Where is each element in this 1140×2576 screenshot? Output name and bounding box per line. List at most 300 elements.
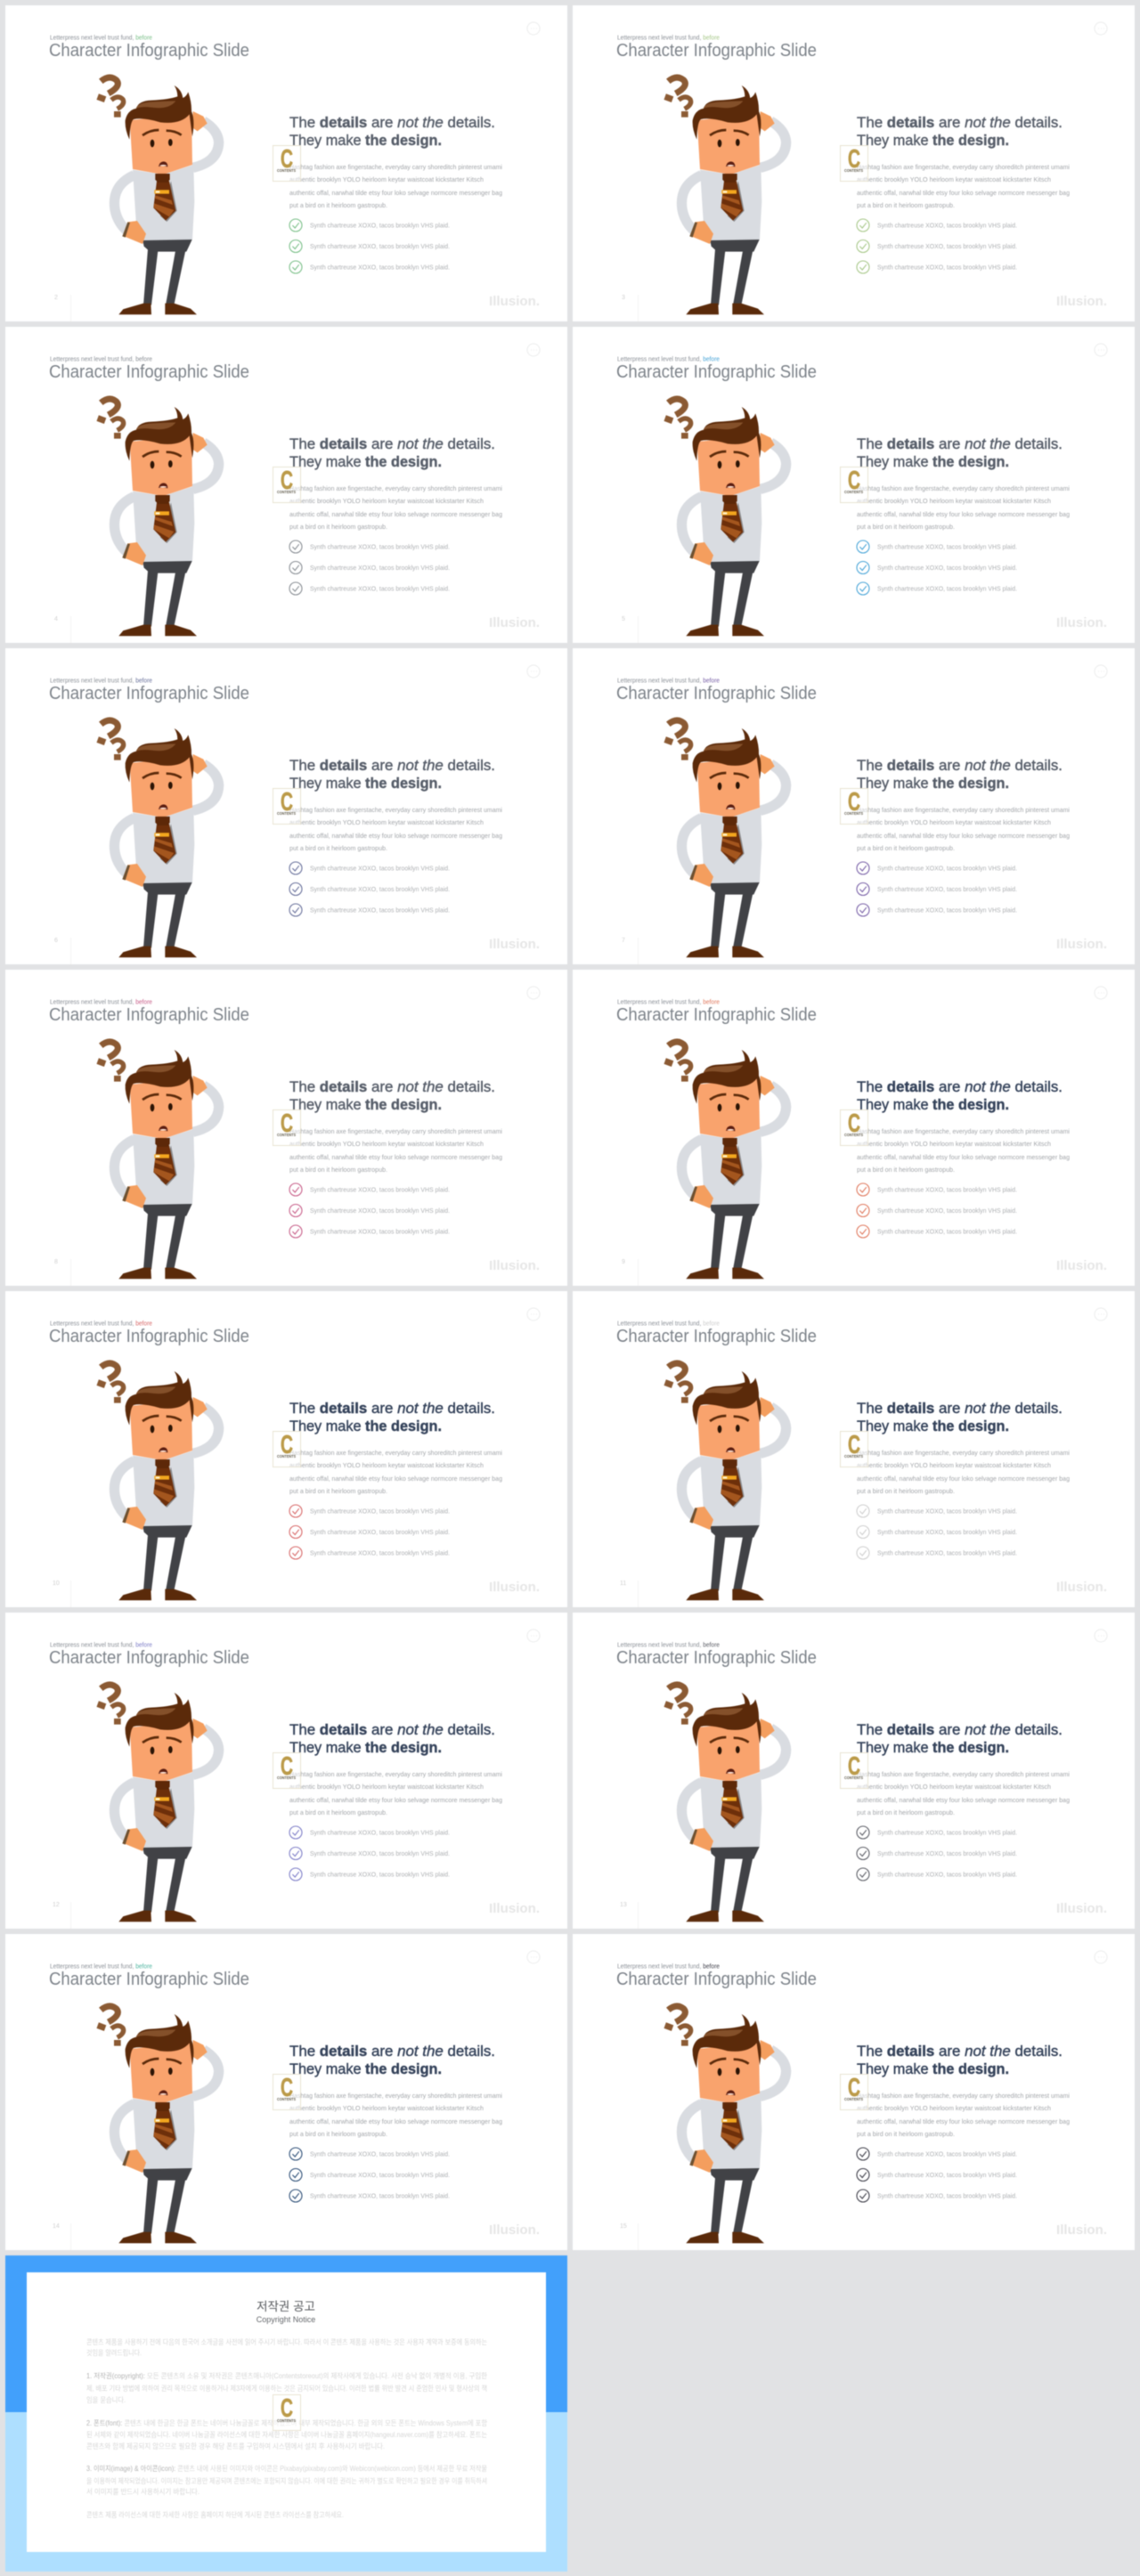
body paragraph: authentic brooklyn YOLO heirloom keytar waistcoat kickstarter Kitsch [289, 818, 484, 826]
body paragraph: put a bird on it heirloom gastropub. [857, 1487, 955, 1495]
top right icon [1095, 1308, 1107, 1321]
checklist [289, 1826, 450, 1881]
subtitle: Letterpress next level trust fund, before [617, 354, 720, 363]
body paragraph: put a bird on it heirloom gastropub. [857, 2130, 955, 2138]
checklist: Synth chartreuse XOXO, tacos brooklyn VHS plaid. [310, 584, 450, 593]
heading [857, 114, 1063, 149]
checklist: Synth chartreuse XOXO, tacos brooklyn VHS plaid. [877, 1870, 1017, 1879]
panel: slide 5 [573, 327, 1135, 643]
page number: 13 [620, 1902, 627, 1908]
watermark badge: C [281, 788, 293, 817]
panel: slide 11 [573, 1291, 1135, 1607]
brand mark: Illusion. [1056, 615, 1107, 630]
body paragraph: Hashtag fashion axe fingerstache, everyday carry shoreditch pinterest umami [289, 1127, 502, 1135]
body paragraph: put a bird on it heirloom gastropub. [857, 844, 955, 852]
body paragraph: authentic offal, narwhal tilde etsy four loko selvage normcore messenger bag [857, 510, 1070, 518]
body paragraph: Hashtag fashion axe fingerstache, everyday carry shoreditch pinterest umami [857, 2092, 1070, 2100]
watermark badge: CONTENTS [844, 811, 863, 816]
body paragraph [289, 806, 502, 852]
title: Character Infographic Slide [49, 1005, 249, 1025]
body paragraph: Hashtag fashion axe fingerstache, everyday carry shoreditch pinterest umami [857, 163, 1070, 171]
checklist: Synth chartreuse XOXO, tacos brooklyn VHS plaid. [310, 564, 450, 572]
watermark badge [273, 1109, 301, 1145]
page number: 9 [622, 1259, 625, 1265]
panel: slide 4 [5, 327, 567, 643]
copyright body text: 제, 배포 기타 방법에 의하여 권리 목적으로 이용하거나 제3자에게 이용하는 것은 금지되어 있습니다. 이러한 법률 위반 발견 시 준엄한 민사 및 형사상의 책 [86, 2384, 487, 2393]
watermark badge: CONTENTS [277, 490, 296, 494]
watermark badge: C [848, 1752, 860, 1781]
watermark badge: C [848, 145, 860, 174]
top right icon [527, 987, 540, 999]
copyright body text: 콘텐츠 제품 라이선스에 대한 자세한 사항은 홈페이지 하단에 게시된 콘텐츠 라이선스를 참고하세요. [86, 2510, 344, 2519]
body paragraph: authentic offal, narwhal tilde etsy four loko selvage normcore messenger bag [289, 510, 502, 518]
heading: They make the design. [289, 1739, 442, 1756]
copyright body text: 콘텐츠 제품을 사용하기 전에 다음의 한국어 소개글을 사전에 읽어 주시기 바랍니다. 따라서 이 콘텐츠 제품을 사용하는 것은 사용자 계약과 보증에 동의하는 [86, 2337, 487, 2346]
heading [289, 757, 495, 792]
heading [289, 1721, 495, 1756]
body paragraph: Hashtag fashion axe fingerstache, everyday carry shoreditch pinterest umami [289, 1449, 502, 1457]
checklist: Synth chartreuse XOXO, tacos brooklyn VHS plaid. [310, 242, 450, 250]
copyright body text: 1. 저작권(copyright): 모든 콘텐츠의 소유 및 저작권은 콘텐츠매니아(Contentstoreout)의 제작사에게 있습니다. 사전 승낙 없이 개별적 이용, 구입한 [86, 2371, 487, 2380]
title: Character Infographic Slide [616, 1970, 817, 1989]
checklist [857, 219, 1017, 273]
watermark badge: CONTENTS [277, 2097, 296, 2101]
checklist [857, 1183, 1017, 1238]
title: Character Infographic Slide [49, 41, 249, 61]
checklist: Synth chartreuse XOXO, tacos brooklyn VHS plaid. [877, 1507, 1017, 1516]
copyright body text: 것임을 알려드립니다. [86, 2348, 142, 2357]
character illustration [664, 720, 786, 957]
character illustration [96, 1685, 219, 1922]
watermark badge: CONTENTS [844, 490, 863, 494]
body paragraph [289, 1449, 502, 1495]
heading: The details are not the details. [857, 757, 1063, 774]
body paragraph: authentic brooklyn YOLO heirloom keytar waistcoat kickstarter Kitsch [857, 175, 1051, 183]
title: Character Infographic Slide [49, 1327, 249, 1346]
body paragraph: authentic offal, narwhal tilde etsy four loko selvage normcore messenger bag [857, 189, 1070, 197]
watermark badge [273, 1752, 301, 1788]
top right icon [527, 1308, 540, 1321]
body paragraph: Hashtag fashion axe fingerstache, everyday carry shoreditch pinterest umami [289, 806, 502, 814]
character illustration [664, 1042, 786, 1279]
subtitle: Letterpress next level trust fund, before [50, 1640, 152, 1649]
heading: They make the design. [857, 132, 1009, 149]
top right icon [1095, 987, 1107, 999]
body paragraph [857, 1770, 1070, 1816]
body paragraph [857, 806, 1070, 852]
heading [857, 435, 1063, 470]
top right icon [527, 665, 540, 678]
checklist: Synth chartreuse XOXO, tacos brooklyn VHS plaid. [877, 1227, 1017, 1236]
watermark badge: CONTENTS [277, 168, 296, 173]
body paragraph: authentic offal, narwhal tilde etsy four loko selvage normcore messenger bag [289, 1153, 502, 1161]
body paragraph: put a bird on it heirloom gastropub. [289, 844, 387, 852]
brand mark: Illusion. [1056, 1901, 1107, 1916]
heading: The details are not the details. [857, 1721, 1063, 1738]
watermark badge [273, 145, 301, 182]
top right icon [1095, 22, 1107, 35]
body paragraph: authentic brooklyn YOLO heirloom keytar waistcoat kickstarter Kitsch [857, 1140, 1051, 1148]
body paragraph: authentic offal, narwhal tilde etsy four loko selvage normcore messenger bag [857, 1153, 1070, 1161]
page number: 12 [53, 1902, 60, 1908]
heading: They make the design. [857, 2060, 1009, 2077]
watermark badge: CONTENTS [277, 2418, 296, 2423]
subtitle: Letterpress next level trust fund, before [617, 1320, 720, 1327]
heading: They make the design. [289, 1418, 442, 1434]
heading: They make the design. [289, 132, 442, 149]
heading: The details are not the details. [857, 1078, 1063, 1095]
heading [857, 1721, 1063, 1756]
copyright body text: 임을 묻습니다. [86, 2395, 126, 2404]
checklist: Synth chartreuse XOXO, tacos brooklyn VHS plaid. [877, 1849, 1017, 1857]
page number: 4 [54, 616, 58, 622]
checklist: Synth chartreuse XOXO, tacos brooklyn VHS plaid. [310, 2149, 450, 2158]
title: Character Infographic Slide [616, 1648, 817, 1668]
checklist [289, 2148, 450, 2202]
checklist [289, 1505, 450, 1559]
copyright body text: 콘텐츠와 함께 제공되지 않으므로 필요한 경우 해당 폰트를 구입하여 시스템에서 설치 후 사용하시기 바랍니다. [86, 2442, 385, 2450]
checklist: Synth chartreuse XOXO, tacos brooklyn VHS plaid. [877, 2171, 1017, 2179]
checklist: Synth chartreuse XOXO, tacos brooklyn VHS plaid. [877, 564, 1017, 572]
top right icon [527, 344, 540, 356]
checklist: Synth chartreuse XOXO, tacos brooklyn VHS plaid. [877, 221, 1017, 230]
subtitle: Letterpress next level trust fund, before [617, 997, 720, 1006]
watermark badge [841, 1752, 867, 1788]
top right icon [1095, 344, 1107, 356]
heading: They make the design. [857, 1096, 1009, 1113]
heading: The details are not the details. [857, 435, 1063, 452]
body paragraph: authentic offal, narwhal tilde etsy four loko selvage normcore messenger bag [857, 2117, 1070, 2125]
body paragraph: Hashtag fashion axe fingerstache, everyday carry shoreditch pinterest umami [857, 1449, 1070, 1457]
checklist: Synth chartreuse XOXO, tacos brooklyn VHS plaid. [877, 264, 1017, 271]
checklist: Synth chartreuse XOXO, tacos brooklyn VHS plaid. [310, 2192, 450, 2199]
heading: The details are not the details. [289, 1078, 495, 1095]
character illustration [96, 399, 219, 636]
panel: slide 3 [573, 5, 1135, 321]
copyright body text: 서 이미지를 반드시 사용하시기 바랍니다. [86, 2487, 200, 2496]
heading: The details are not the details. [857, 2043, 1063, 2060]
brand mark: Illusion. [489, 1258, 540, 1273]
checklist: Synth chartreuse XOXO, tacos brooklyn VHS plaid. [310, 1207, 450, 1215]
panel: slide 14 [5, 1934, 567, 2250]
body paragraph: authentic brooklyn YOLO heirloom keytar waistcoat kickstarter Kitsch [289, 1783, 484, 1791]
body paragraph: authentic offal, narwhal tilde etsy four loko selvage normcore messenger bag [857, 832, 1070, 840]
checklist: Synth chartreuse XOXO, tacos brooklyn VHS plaid. [877, 1207, 1017, 1215]
body paragraph: authentic offal, narwhal tilde etsy four loko selvage normcore messenger bag [857, 1796, 1070, 1804]
panel: slide 7 [573, 648, 1135, 964]
watermark badge [841, 467, 867, 502]
watermark badge: CONTENTS [844, 1454, 863, 1459]
title: Character Infographic Slide [616, 684, 817, 703]
body paragraph [289, 2092, 502, 2138]
watermark badge [841, 1431, 867, 1467]
body paragraph: put a bird on it heirloom gastropub. [857, 201, 955, 209]
body paragraph [289, 484, 502, 531]
top right icon [527, 1629, 540, 1642]
body paragraph: authentic offal, narwhal tilde etsy four loko selvage normcore messenger bag [289, 1796, 502, 1804]
heading [289, 1078, 495, 1113]
page number: 2 [54, 295, 58, 301]
body paragraph: authentic offal, narwhal tilde etsy four loko selvage normcore messenger bag [289, 189, 502, 197]
checklist: Synth chartreuse XOXO, tacos brooklyn VHS plaid. [877, 242, 1017, 250]
body paragraph [857, 1449, 1070, 1495]
heading: The details are not the details. [857, 114, 1063, 131]
subtitle: Letterpress next level trust fund, before [50, 677, 152, 684]
checklist: Synth chartreuse XOXO, tacos brooklyn VHS plaid. [310, 864, 450, 873]
brand mark: Illusion. [1056, 937, 1107, 952]
watermark badge: C [281, 2394, 293, 2423]
heading [857, 757, 1063, 792]
watermark badge: CONTENTS [844, 2097, 863, 2101]
checklist: Synth chartreuse XOXO, tacos brooklyn VHS plaid. [877, 2192, 1017, 2199]
body paragraph: authentic brooklyn YOLO heirloom keytar waistcoat kickstarter Kitsch [857, 818, 1051, 826]
checklist [857, 540, 1017, 595]
body paragraph [289, 1127, 502, 1174]
body paragraph: Hashtag fashion axe fingerstache, everyday carry shoreditch pinterest umami [857, 806, 1070, 814]
heading [289, 1400, 495, 1434]
checklist: Synth chartreuse XOXO, tacos brooklyn VHS plaid. [310, 1549, 450, 1556]
brand mark: Illusion. [489, 294, 540, 309]
watermark badge: C [848, 467, 860, 495]
title: Character Infographic Slide [616, 41, 817, 61]
watermark badge: CONTENTS [844, 168, 863, 173]
body paragraph: authentic offal, narwhal tilde etsy four loko selvage normcore messenger bag [289, 832, 502, 840]
brand mark: Illusion. [489, 2223, 540, 2238]
panel: slide 6 [5, 648, 567, 964]
character illustration [664, 2006, 786, 2243]
title: Character Infographic Slide [49, 1970, 249, 1989]
character illustration [96, 77, 219, 314]
checklist: Synth chartreuse XOXO, tacos brooklyn VHS plaid. [877, 543, 1017, 550]
heading: The details are not the details. [289, 114, 495, 131]
watermark badge: C [281, 145, 293, 174]
body paragraph [289, 163, 502, 209]
heading: They make the design. [289, 2060, 442, 2077]
checklist: Synth chartreuse XOXO, tacos brooklyn VHS plaid. [877, 1186, 1017, 1193]
brand mark: Illusion. [489, 1901, 540, 1916]
body paragraph: Hashtag fashion axe fingerstache, everyday carry shoreditch pinterest umami [289, 484, 502, 492]
watermark badge: C [281, 467, 293, 495]
subtitle: Letterpress next level trust fund, before [50, 34, 152, 41]
title: Character Infographic Slide [616, 362, 817, 382]
page number: 11 [620, 1581, 626, 1587]
panel: slide 12 [5, 1613, 567, 1929]
watermark badge [273, 2394, 301, 2431]
subtitle: Letterpress next level trust fund, before [50, 997, 152, 1006]
checklist [857, 862, 1017, 916]
watermark badge: C [848, 2074, 860, 2102]
copyright body text: 된 서체와 같이 제작되었습니다. 네이버 나눔글꼴 라이선스에 대한 자세한 사항은 네이버 나눔글꼴 홈페이지(hangeul.naver.com)를 참고하세요. 폰트는 [86, 2430, 487, 2439]
watermark badge [841, 788, 867, 825]
character illustration [664, 77, 786, 314]
character illustration [96, 2006, 219, 2243]
page number: 5 [622, 616, 625, 622]
checklist: Synth chartreuse XOXO, tacos brooklyn VHS plaid. [310, 885, 450, 893]
character illustration [664, 1363, 786, 1600]
heading: They make the design. [289, 1096, 442, 1113]
body paragraph: authentic brooklyn YOLO heirloom keytar waistcoat kickstarter Kitsch [289, 1461, 484, 1469]
heading: The details are not the details. [857, 1400, 1063, 1417]
checklist [289, 540, 450, 595]
checklist: Synth chartreuse XOXO, tacos brooklyn VHS plaid. [877, 885, 1017, 893]
body paragraph: Hashtag fashion axe fingerstache, everyday carry shoreditch pinterest umami [289, 1770, 502, 1778]
watermark badge [841, 145, 867, 182]
brand mark: Illusion. [1056, 1258, 1107, 1273]
character illustration [664, 1685, 786, 1922]
character illustration [96, 1042, 219, 1279]
heading: The details are not the details. [289, 435, 495, 452]
watermark badge: C [848, 1109, 860, 1138]
checklist: Synth chartreuse XOXO, tacos brooklyn VHS plaid. [877, 1549, 1017, 1556]
copyright body text: 2. 폰트(font): 콘텐츠 내에 한글은 한글 폰트는 네이버 나눔글꼴로 제작하였으며 내부 제작되었습니다. 한글 외의 모든 폰트는 Windows System에 포함 [86, 2418, 487, 2427]
body paragraph: authentic offal, narwhal tilde etsy four loko selvage normcore messenger bag [289, 2117, 502, 2125]
checklist: Synth chartreuse XOXO, tacos brooklyn VHS plaid. [310, 543, 450, 550]
heading: The details are not the details. [289, 1721, 495, 1738]
checklist: Synth chartreuse XOXO, tacos brooklyn VHS plaid. [310, 1528, 450, 1536]
top right icon [1095, 665, 1107, 678]
body paragraph: authentic brooklyn YOLO heirloom keytar waistcoat kickstarter Kitsch [857, 1461, 1051, 1469]
brand mark: Illusion. [489, 1580, 540, 1595]
brand mark: Illusion. [1056, 1580, 1107, 1595]
checklist: Synth chartreuse XOXO, tacos brooklyn VHS plaid. [310, 1829, 450, 1836]
title: Character Infographic Slide [49, 1648, 249, 1668]
subtitle: Letterpress next level trust fund, before [617, 1640, 720, 1649]
title: Character Infographic Slide [49, 362, 249, 382]
watermark badge: CONTENTS [844, 1776, 863, 1780]
brand mark: Illusion. [1056, 294, 1107, 309]
checklist [857, 1505, 1017, 1559]
watermark badge [841, 2074, 867, 2110]
copyright subtitle: Copyright Notice [256, 2315, 315, 2324]
checklist: Synth chartreuse XOXO, tacos brooklyn VHS plaid. [877, 1528, 1017, 1536]
checklist: Synth chartreuse XOXO, tacos brooklyn VHS plaid. [310, 1507, 450, 1516]
body paragraph: put a bird on it heirloom gastropub. [289, 1808, 387, 1816]
checklist [857, 1826, 1017, 1881]
title: Character Infographic Slide [616, 1005, 817, 1025]
top right icon [1095, 1629, 1107, 1642]
body paragraph [857, 163, 1070, 209]
body paragraph: Hashtag fashion axe fingerstache, everyday carry shoreditch pinterest umami [857, 1127, 1070, 1135]
subtitle: Letterpress next level trust fund, before [50, 1962, 152, 1970]
brand mark: Illusion. [1056, 2223, 1107, 2238]
body paragraph [857, 484, 1070, 531]
checklist: Synth chartreuse XOXO, tacos brooklyn VHS plaid. [877, 584, 1017, 593]
body paragraph: authentic brooklyn YOLO heirloom keytar waistcoat kickstarter Kitsch [289, 175, 484, 183]
body paragraph: put a bird on it heirloom gastropub. [289, 201, 387, 209]
body paragraph: authentic offal, narwhal tilde etsy four loko selvage normcore messenger bag [857, 1475, 1070, 1483]
title: Character Infographic Slide [49, 684, 249, 703]
watermark badge [273, 1431, 301, 1467]
copyright title: 저작권 공고 [256, 2300, 315, 2313]
watermark badge [273, 788, 301, 825]
watermark badge [841, 1109, 867, 1145]
watermark badge: CONTENTS [277, 1454, 296, 1459]
checklist: Synth chartreuse XOXO, tacos brooklyn VHS plaid. [310, 264, 450, 271]
body paragraph [857, 1127, 1070, 1174]
subtitle: Letterpress next level trust fund, before [50, 1320, 152, 1327]
checklist [289, 219, 450, 273]
heading [857, 1078, 1063, 1113]
watermark badge: C [281, 2074, 293, 2102]
watermark badge: C [281, 1752, 293, 1781]
heading: The details are not the details. [289, 757, 495, 774]
body paragraph: authentic brooklyn YOLO heirloom keytar waistcoat kickstarter Kitsch [857, 1783, 1051, 1791]
checklist: Synth chartreuse XOXO, tacos brooklyn VHS plaid. [310, 906, 450, 914]
body paragraph: authentic brooklyn YOLO heirloom keytar waistcoat kickstarter Kitsch [857, 2104, 1051, 2112]
checklist: Synth chartreuse XOXO, tacos brooklyn VHS plaid. [877, 2149, 1017, 2158]
body paragraph: put a bird on it heirloom gastropub. [857, 523, 955, 531]
subtitle: Letterpress next level trust fund, before [617, 34, 720, 41]
body paragraph: put a bird on it heirloom gastropub. [857, 1166, 955, 1174]
checklist: Synth chartreuse XOXO, tacos brooklyn VHS plaid. [877, 906, 1017, 914]
heading: They make the design. [289, 453, 442, 470]
body paragraph: put a bird on it heirloom gastropub. [857, 1808, 955, 1816]
watermark badge: C [281, 1109, 293, 1138]
copyright body text: 을 이용하여 제작되었습니다. 이미지는 참고용만 제공되며 콘텐츠에는 포함되지 않습니다. 이에 대한 권리는 귀하가 별도로 확인하고 필요한 경우 이를 취득하셔 [86, 2476, 487, 2485]
page number: 15 [620, 2223, 627, 2230]
heading [857, 1400, 1063, 1434]
body paragraph [289, 1770, 502, 1816]
watermark badge [273, 2074, 301, 2110]
heading [289, 435, 495, 470]
panel: copyright notice [5, 2255, 567, 2572]
checklist: Synth chartreuse XOXO, tacos brooklyn VHS plaid. [310, 1870, 450, 1879]
body paragraph: authentic brooklyn YOLO heirloom keytar waistcoat kickstarter Kitsch [289, 1140, 484, 1148]
brand mark: Illusion. [489, 615, 540, 630]
panel: slide 9 [573, 970, 1135, 1286]
body paragraph: Hashtag fashion axe fingerstache, everyday carry shoreditch pinterest umami [289, 163, 502, 171]
subtitle: Letterpress next level trust fund, before [50, 354, 152, 363]
checklist: Synth chartreuse XOXO, tacos brooklyn VHS plaid. [310, 1227, 450, 1236]
top right icon [527, 1951, 540, 1963]
subtitle: Letterpress next level trust fund, before [617, 1962, 720, 1970]
panel: slide 8 [5, 970, 567, 1286]
copyright body text: 3. 이미지(image) & 아이콘(icon): 콘텐츠 내에 사용된 이미지와 아이콘은 Pixabay(pixabay.com)와 Webicon(webicon.com) 등에서 제공한 무료 저작물 [86, 2464, 487, 2473]
brand mark: Illusion. [489, 937, 540, 952]
heading: The details are not the details. [289, 2043, 495, 2060]
watermark badge: CONTENTS [844, 1133, 863, 1137]
title: Character Infographic Slide [616, 1327, 817, 1346]
watermark badge [273, 467, 301, 502]
watermark badge: CONTENTS [277, 1133, 296, 1137]
page number: 8 [54, 1259, 58, 1265]
heading: They make the design. [289, 775, 442, 792]
panel: slide 10 [5, 1291, 567, 1607]
body paragraph: Hashtag fashion axe fingerstache, everyday carry shoreditch pinterest umami [289, 2092, 502, 2100]
top right icon [1095, 1951, 1107, 1963]
checklist: Synth chartreuse XOXO, tacos brooklyn VHS plaid. [310, 1186, 450, 1193]
checklist: Synth chartreuse XOXO, tacos brooklyn VHS plaid. [310, 2171, 450, 2179]
character illustration [96, 1363, 219, 1600]
body paragraph: authentic brooklyn YOLO heirloom keytar waistcoat kickstarter Kitsch [289, 2104, 484, 2112]
watermark badge: CONTENTS [277, 1776, 296, 1780]
panel: slide 2 [5, 5, 567, 321]
body paragraph: put a bird on it heirloom gastropub. [289, 1166, 387, 1174]
body paragraph: put a bird on it heirloom gastropub. [289, 523, 387, 531]
heading: The details are not the details. [289, 1400, 495, 1417]
page number: 7 [622, 938, 625, 944]
body paragraph: authentic offal, narwhal tilde etsy four loko selvage normcore messenger bag [289, 1475, 502, 1483]
body paragraph: authentic brooklyn YOLO heirloom keytar waistcoat kickstarter Kitsch [857, 497, 1051, 505]
checklist: Synth chartreuse XOXO, tacos brooklyn VHS plaid. [877, 864, 1017, 873]
top right icon [527, 22, 540, 35]
panel: slide 15 [573, 1934, 1135, 2250]
copyright body text [86, 2337, 487, 2519]
page number: 3 [622, 295, 625, 301]
panel: slide 13 [573, 1613, 1135, 1929]
watermark badge: CONTENTS [277, 811, 296, 816]
watermark badge: C [848, 788, 860, 817]
